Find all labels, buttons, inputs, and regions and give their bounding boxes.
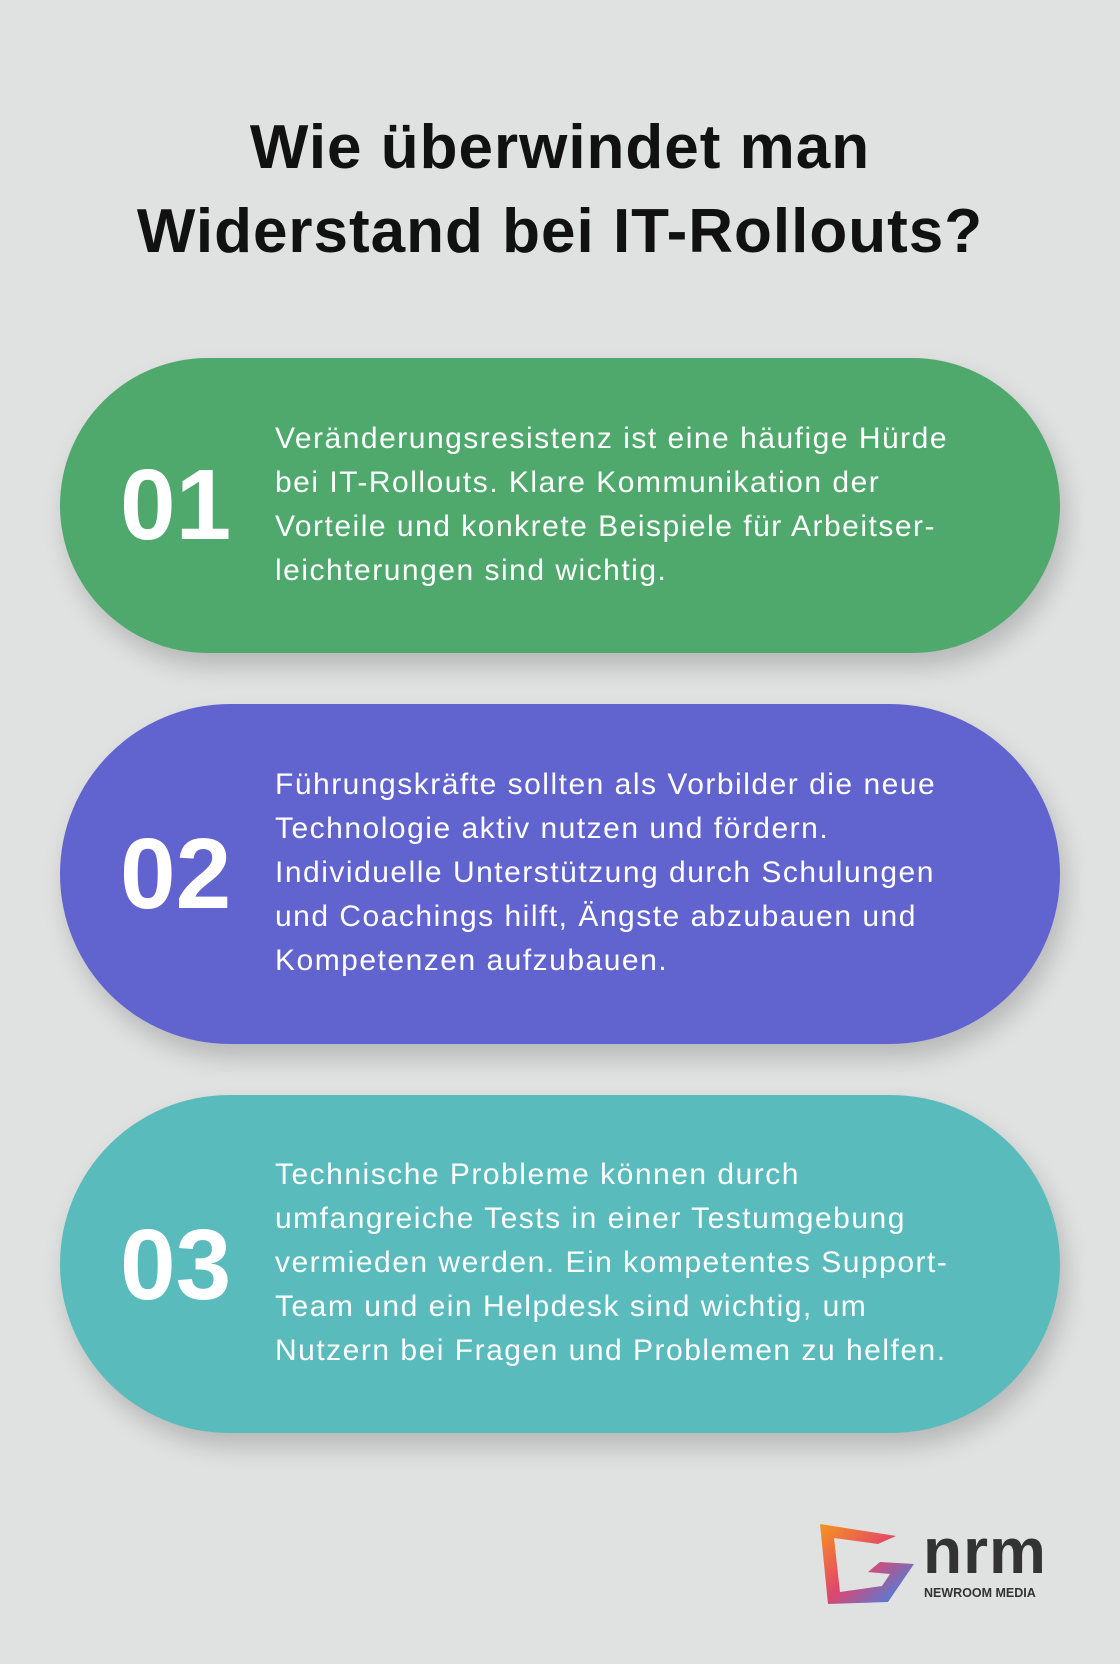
panel: step 01 (60, 358, 1060, 653)
brand name: nrm (923, 1515, 1047, 1587)
text 03: Technische Probleme können durch (275, 1158, 800, 1191)
text 03: vermieden werden. Ein kompetentes Support- (275, 1246, 948, 1279)
text 01 (275, 422, 948, 587)
text 03 (275, 1158, 948, 1367)
panel: step 03 (60, 1095, 1060, 1433)
logo (820, 1515, 1047, 1604)
title (137, 113, 983, 266)
text 03: Team und ein Helpdesk sind wichtig, um (275, 1290, 867, 1323)
text 02: und Coachings hilft, Ängste abzubauen und (275, 900, 917, 933)
text 02: Kompetenzen aufzubauen. (275, 944, 668, 977)
text 02: Technologie aktiv nutzen und fördern. (275, 812, 829, 845)
title: Widerstand bei IT-Rollouts? (137, 197, 983, 266)
text 02: Führungskräfte sollten als Vorbilder die neue (275, 768, 936, 801)
text 01: Vorteile und konkrete Beispiele für Arbeitser- (275, 510, 936, 543)
icon: logo mark (820, 1524, 914, 1604)
title: Wie überwindet man (250, 113, 870, 182)
text 02: Individuelle Unterstützung durch Schulungen (275, 856, 935, 889)
number 01: 01 (120, 449, 231, 561)
text 02 (275, 768, 936, 977)
text 03: Nutzern bei Fragen und Problemen zu helfen. (275, 1334, 947, 1367)
brand tagline: NEWROOM MEDIA (924, 1586, 1036, 1600)
number 02: 02 (120, 818, 231, 930)
number 03: 03 (120, 1209, 231, 1321)
text 01: leichterungen sind wichtig. (275, 554, 667, 587)
text 01: bei IT-Rollouts. Klare Kommunikation der (275, 466, 880, 499)
text 03: umfangreiche Tests in einer Testumgebung (275, 1202, 906, 1235)
panel: step 02 (60, 704, 1060, 1044)
text 01: Veränderungsresistenz ist eine häufige Hürde (275, 422, 948, 455)
